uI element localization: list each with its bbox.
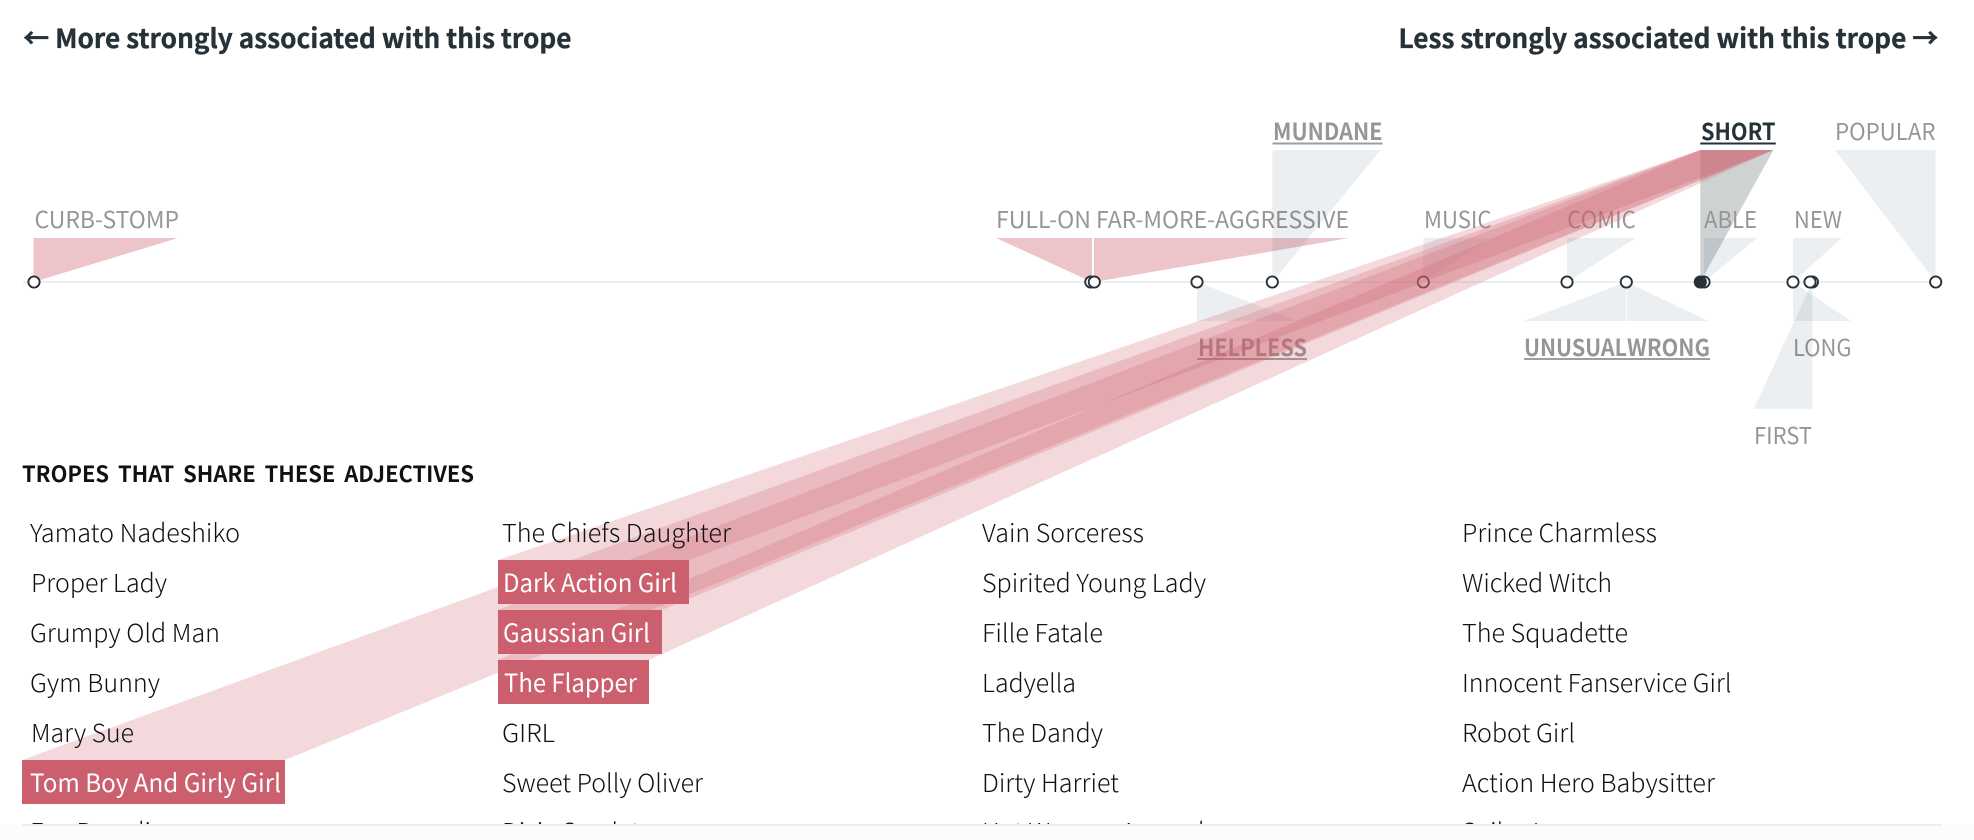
adjective: first: FIRST [1754,417,1812,451]
adjective: wrong [1627,282,1710,363]
list column 1: Proper Lady [31,564,167,600]
list column 1: Grumpy Old Man [30,614,220,650]
highlighted trope: the flapper: The Flapper [504,664,637,700]
adjective: music [1423,201,1492,282]
adjective: popular: POPULAR [1835,113,1936,147]
list column 3: Spirited Young Lady [982,564,1206,600]
list column 3: Fille Fatale [982,614,1103,650]
adjective: helpless [1197,282,1307,363]
heading: less strongly associated: Less strongly associated with this trope → [1398,17,1938,56]
trope list [22,514,1732,840]
list column 2: GIRL [502,714,555,750]
axis line [23,281,1942,283]
list column 1: Yamato Nadeshiko [30,514,240,550]
list column 2 [502,514,732,840]
ribbons linking SHORT to highlighted tropes [22,150,1774,760]
list column 4: Innocent Fanservice Girl [1462,664,1732,700]
adjective chart: triangles and labels [34,113,1936,451]
list column 4 [1462,514,1732,840]
adjective: far-more-aggressive [1094,201,1349,282]
adjective: comic: COMIC [1567,201,1636,235]
list column 3: The Dandy [982,714,1103,750]
adjective: unusual: UNUSUAL [1524,329,1627,363]
list column 4: The Squadette [1462,614,1628,650]
adjective: able [1704,201,1757,282]
adjective: music: MUSIC [1424,201,1492,235]
list column 1: Mary Sue [31,714,134,750]
adjective: full-on: FULL-ON [996,201,1091,235]
adjective: short (selected): SHORT [1701,113,1776,147]
subheading: tropes that share these adjectives: TROPES THAT SHARE THESE ADJECTIVES [22,457,474,489]
bottom fade bar clipping the list [0,824,1974,840]
list column 4: Prince Charmless [1462,514,1657,550]
adjective: mundane: MUNDANE [1273,113,1382,147]
adjective: first [1754,282,1812,451]
list column 4: Wicked Witch [1462,564,1612,600]
highlighted trope: tom boy and girly girl: Tom Boy And Girly Girl [30,764,281,800]
adjective: able: ABLE [1704,201,1757,235]
list column 2: The Chiefs Daughter [502,514,732,550]
adjective: long: LONG [1793,329,1852,363]
list column 1 [30,514,240,840]
adjective: new: NEW [1794,201,1842,235]
highlighted trope: dark action girl: Dark Action Girl [503,564,677,600]
list column 4: Action Hero Babysitter [1462,764,1716,800]
adjective: far-more-aggressive: FAR-MORE-AGGRESSIVE [1096,201,1349,235]
list column 3: Dirty Harriet [982,764,1119,800]
list column 1: Gym Bunny [30,664,160,700]
adjective: helpless: HELPLESS [1198,329,1307,363]
list column 4: Robot Girl [1462,714,1575,750]
list column 3 [982,514,1206,840]
adjective: curb-stomp: CURB-STOMP [34,201,179,235]
highlighted trope: gaussian girl: Gaussian Girl [503,614,650,650]
adjective: curb-stomp [34,201,179,282]
list column 2: Sweet Polly Oliver [502,764,704,800]
adjective: wrong: WRONG [1627,329,1710,363]
adjective: full-on [996,201,1092,282]
list column 3: Vain Sorceress [982,514,1144,550]
list column 3: Ladyella [982,664,1076,700]
adjective: long [1793,282,1852,363]
adjective: unusual [1524,282,1628,363]
adjective: mundane [1272,113,1382,282]
adjective: short (selected) [1700,113,1776,282]
axis markers [28,276,1941,288]
heading: more strongly associated: ← More strongly associated with this trope [23,17,572,56]
adjective: new [1793,201,1842,282]
adjective: popular [1835,113,1936,282]
adjective: comic [1567,201,1636,282]
